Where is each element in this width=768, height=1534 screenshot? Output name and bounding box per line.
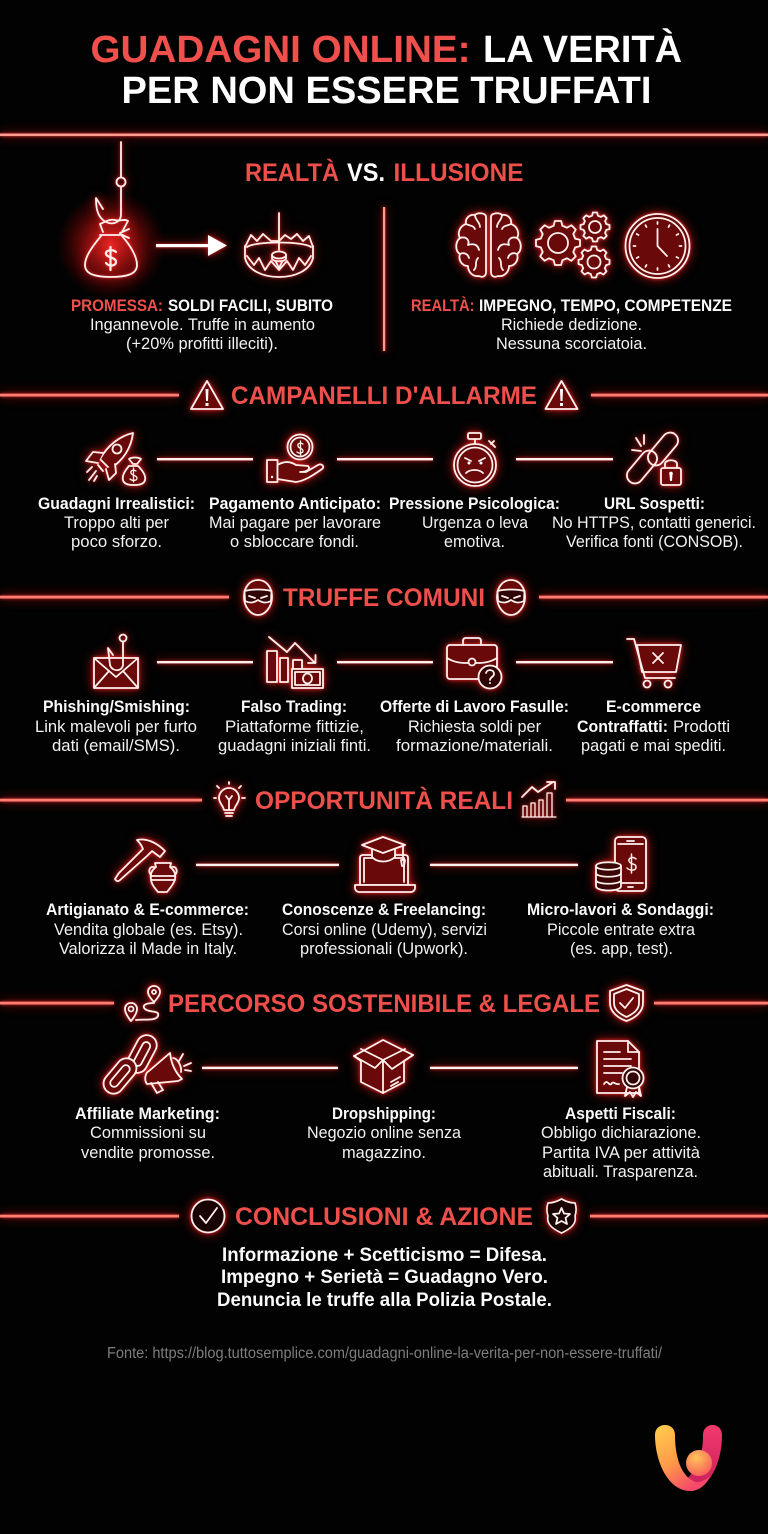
text: pressione psicologica bbox=[389, 494, 560, 551]
text: conclusioni: Impegno + Serietà = Guadagno Vero. bbox=[221, 1267, 548, 1288]
heading: truffe comuni: TRUFFE COMUNI bbox=[283, 584, 485, 612]
icon: briefcase with question mark bbox=[447, 638, 502, 688]
text: realtà: REALTÀ: bbox=[411, 296, 474, 315]
title bbox=[90, 27, 682, 112]
text: pressione psicologica: emotiva. bbox=[444, 532, 505, 551]
icon: thief mask right bbox=[497, 580, 525, 615]
text: affiliate marketing: Affiliate Marketing: bbox=[75, 1104, 220, 1123]
text: pagamento anticipato bbox=[209, 494, 381, 551]
section lines: conclusioni bbox=[0, 1215, 768, 1218]
text: aspetti fiscali bbox=[541, 1104, 701, 1181]
icon: light bulb bbox=[214, 782, 245, 816]
connectors: campanelli bbox=[157, 458, 613, 460]
icon: hand with coin bbox=[267, 434, 323, 482]
connectors: opportunità bbox=[196, 864, 578, 866]
text: falso trading bbox=[218, 697, 371, 755]
text: dropshipping bbox=[307, 1104, 462, 1162]
text: guadagni irrealistici: Guadagni Irrealistici: bbox=[38, 494, 195, 513]
heading: realtà vs illusione bbox=[245, 158, 524, 187]
text: conclusioni: Informazione + Scetticismo = Difesa. bbox=[222, 1245, 547, 1266]
text: realtà: Nessuna scorciatoia. bbox=[496, 334, 647, 353]
text: url sospetti: URL Sospetti: bbox=[604, 494, 705, 513]
text: pressione psicologica: Pressione Psicologica: bbox=[389, 494, 560, 513]
text: micro-lavori: Micro-lavori & Sondaggi: bbox=[527, 900, 714, 919]
icon: box bbox=[354, 1040, 413, 1093]
text: conoscenze: professionali (Upwork). bbox=[300, 939, 468, 958]
text: affiliate marketing: vendite promosse. bbox=[81, 1143, 215, 1162]
icon: shopping cart with x bbox=[627, 639, 681, 688]
icon: bear trap bbox=[245, 213, 313, 277]
text: guadagni irrealistici: poco sforzo. bbox=[71, 532, 162, 551]
text: offerte di lavoro bbox=[380, 697, 569, 755]
section lines: truffe bbox=[0, 596, 768, 598]
icon: rocket and money bbox=[86, 433, 145, 485]
icon: money bag on hook bbox=[57, 142, 165, 299]
text: promessa: (+20% profitti illeciti). bbox=[126, 334, 278, 353]
text: micro-lavori bbox=[527, 900, 714, 958]
divider: vertical bbox=[383, 207, 385, 351]
text: artigianato: Artigianato & E-commerce: bbox=[46, 900, 249, 919]
text: affiliate marketing: Commissioni su bbox=[90, 1123, 206, 1142]
text: offerte di lavoro: Richiesta soldi per bbox=[408, 717, 541, 736]
text: affiliate marketing bbox=[75, 1104, 220, 1162]
text: e-commerce contraffatti: Prodotti bbox=[673, 717, 730, 736]
text: url sospetti: Verifica fonti (CONSOB). bbox=[566, 532, 743, 551]
icon: thief mask left bbox=[244, 580, 272, 615]
icon: hammer and vase bbox=[115, 839, 177, 892]
text: artigianato: Vendita globale (es. Etsy). bbox=[54, 920, 243, 939]
text: dropshipping: Negozio online senza bbox=[307, 1123, 462, 1142]
text: conoscenze: Corsi online (Udemy), servizi bbox=[282, 920, 487, 939]
icon: phishing envelope bbox=[94, 634, 138, 688]
heading: realtà vs illusione: VS. bbox=[347, 159, 385, 187]
text: phishing bbox=[35, 697, 197, 755]
text: e-commerce contraffatti: Contraffatti: bbox=[577, 717, 668, 736]
text: offerte di lavoro: formazione/materiali. bbox=[396, 736, 553, 755]
icon: check circle bbox=[192, 1200, 224, 1232]
icon: warning left bbox=[191, 381, 223, 409]
heading: realtà vs illusione: ILLUSIONE bbox=[394, 159, 524, 187]
section lines: percorso bbox=[0, 1002, 768, 1004]
icon: broken link and padlock bbox=[624, 429, 681, 487]
text: artigianato: Valorizza il Made in Italy. bbox=[59, 939, 237, 958]
text: e-commerce contraffatti: E-commerce bbox=[606, 697, 701, 716]
connectors: truffe bbox=[157, 661, 613, 663]
text: phishing: Phishing/Smishing: bbox=[43, 697, 190, 716]
text: e-commerce contraffatti bbox=[577, 697, 730, 755]
text: url sospetti bbox=[552, 494, 756, 551]
icon: police badge bbox=[547, 1199, 576, 1233]
text: artigianato bbox=[46, 900, 249, 958]
icon: route map pins bbox=[125, 986, 160, 1021]
text: aspetti fiscali: abituali. Trasparenza. bbox=[543, 1162, 698, 1181]
arrow: promise to trap bbox=[156, 235, 227, 256]
icon: stopwatch bbox=[454, 433, 496, 486]
text: aspetti fiscali: Aspetti Fiscali: bbox=[565, 1104, 676, 1123]
text: conclusioni bbox=[217, 1245, 552, 1311]
text: promessa bbox=[71, 296, 333, 353]
section lines: opportunità bbox=[0, 799, 768, 802]
text: aspetti fiscali: Obbligo dichiarazione. bbox=[541, 1123, 701, 1142]
icon: clock bbox=[626, 214, 690, 278]
text: e-commerce contraffatti: pagati e mai spediti. bbox=[581, 736, 726, 755]
icon: phone and coins bbox=[596, 837, 646, 891]
text: conoscenze: Conoscenze & Freelancing: bbox=[282, 900, 486, 919]
logo bbox=[655, 1425, 722, 1491]
text: pressione psicologica: Urgenza o leva bbox=[422, 513, 529, 532]
icon: chain and megaphone bbox=[99, 1032, 191, 1098]
text: realtà: IMPEGNO, TEMPO, COMPETENZE bbox=[479, 296, 732, 315]
text: guadagni irrealistici bbox=[38, 494, 195, 551]
divider: top neon line bbox=[0, 134, 768, 136]
text: pagamento anticipato: o sbloccare fondi. bbox=[230, 532, 359, 551]
icon: tax document and seal bbox=[597, 1041, 644, 1097]
text: promessa: PROMESSA: bbox=[71, 296, 163, 315]
text: micro-lavori: Piccole entrate extra bbox=[547, 920, 696, 939]
heading: opportunità reali: OPPORTUNITÀ REALI bbox=[255, 786, 513, 815]
icon: gears bbox=[536, 212, 610, 278]
title: GUADAGNI ONLINE: bbox=[90, 29, 471, 71]
text: conclusioni: Denuncia le truffe alla Polizia Postale. bbox=[217, 1290, 552, 1311]
source line: Fonte: https://blog.tuttosemplice.com/guadagni-online-la-verita-per-non-essere-truffati/ bbox=[107, 1345, 663, 1362]
text: promessa: Ingannevole. Truffe in aumento bbox=[90, 315, 315, 334]
text: promessa: SOLDI FACILI, SUBITO bbox=[168, 296, 333, 315]
text: falso trading: Piattaforme fittizie, bbox=[225, 717, 364, 736]
heading: realtà vs illusione: REALTÀ bbox=[245, 158, 339, 187]
text: conoscenze bbox=[282, 900, 487, 958]
text: phishing: Link malevoli per furto bbox=[35, 717, 197, 736]
text: offerte di lavoro: Offerte di Lavoro Fasulle: bbox=[380, 697, 569, 716]
icon: brain bbox=[456, 213, 521, 277]
text: falso trading: Falso Trading: bbox=[241, 697, 347, 716]
text: dropshipping: Dropshipping: bbox=[332, 1104, 436, 1123]
icon: shield check bbox=[610, 985, 643, 1021]
text: pagamento anticipato: Pagamento Anticipato: bbox=[209, 494, 381, 513]
text: dropshipping: magazzino. bbox=[342, 1143, 426, 1162]
icon: falling chart with money bbox=[267, 637, 323, 688]
heading: campanelli d'allarme: CAMPANELLI D'ALLARME bbox=[231, 382, 537, 410]
text: falso trading: guadagni iniziali finti. bbox=[218, 736, 371, 755]
title: LA VERITÀ bbox=[483, 27, 682, 71]
connectors: percorso bbox=[202, 1067, 578, 1069]
text: realtà: Richiede dedizione. bbox=[501, 315, 642, 334]
text: realtà bbox=[411, 296, 732, 353]
icon: laptop and graduation cap bbox=[355, 837, 415, 892]
heading: percorso sostenibile e legale: PERCORSO SOSTENIBILE & LEGALE bbox=[168, 990, 600, 1018]
text: aspetti fiscali: Partita IVA per attività bbox=[542, 1143, 701, 1162]
text: url sospetti: No HTTPS, contatti generici. bbox=[552, 513, 756, 532]
heading: conclusioni e azione: CONCLUSIONI & AZIONE bbox=[235, 1203, 533, 1231]
icon: warning right bbox=[546, 381, 578, 409]
section lines: campanelli bbox=[0, 394, 768, 396]
text: phishing: dati (email/SMS). bbox=[52, 736, 180, 755]
text: pagamento anticipato: Mai pagare per lavorare bbox=[209, 513, 381, 532]
text: guadagni irrealistici: Troppo alti per bbox=[64, 513, 169, 532]
title: PER NON ESSERE TRUFFATI bbox=[122, 70, 651, 112]
text: micro-lavori: (es. app, test). bbox=[570, 939, 673, 958]
icon: growth chart bbox=[522, 782, 556, 817]
